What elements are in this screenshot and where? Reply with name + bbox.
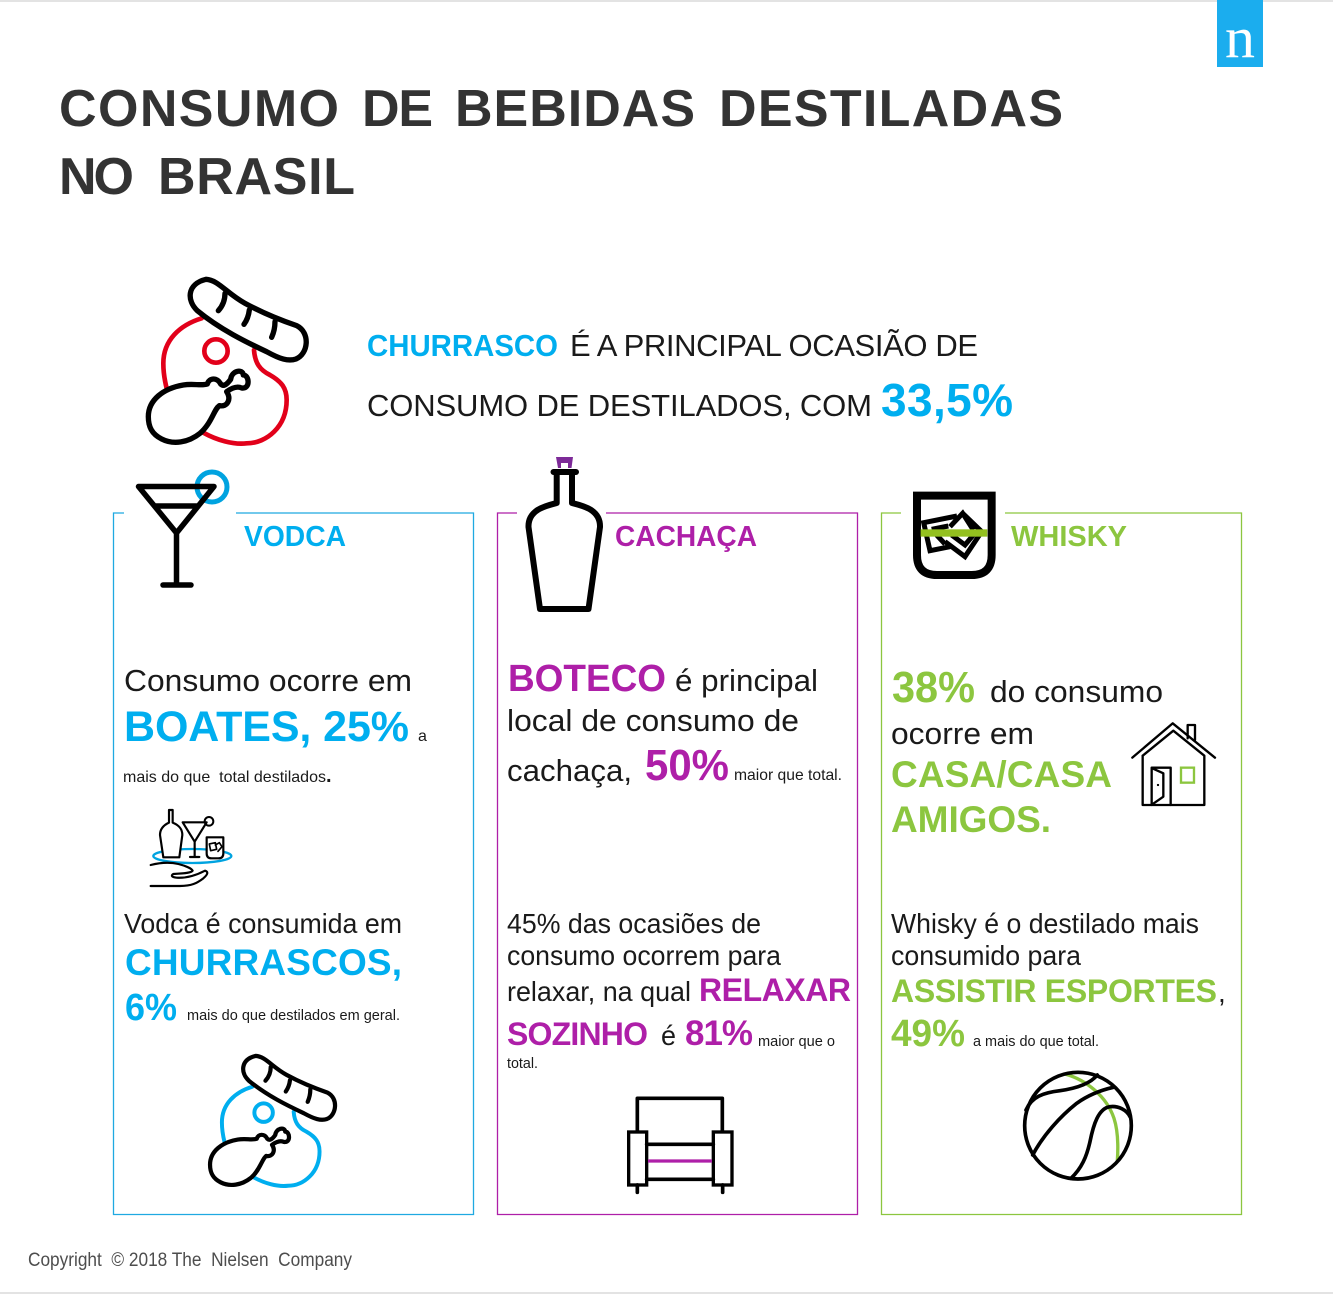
icon: bottle	[528, 457, 600, 609]
text: casa: CASA/CASA	[891, 754, 1112, 795]
text: boteco: BOTECO	[508, 658, 666, 700]
text: boates: BOATES, 25%	[124, 703, 409, 751]
text: boates: Consumo ocorre em	[124, 663, 412, 698]
logo: Nielsen	[1217, 0, 1263, 70]
text: relaxar sozinho: maior que o	[758, 1033, 835, 1050]
text: esportes: 49%	[891, 1013, 965, 1055]
text: boates	[123, 663, 427, 787]
text: esportes: ASSISTIR ESPORTES	[891, 973, 1217, 1009]
text: churrascos: CHURRASCOS,	[125, 942, 402, 983]
text: boteco: 50%	[645, 741, 729, 790]
text: boteco	[507, 658, 842, 790]
headline: churrasco: CHURRASCO	[367, 328, 558, 363]
icon: tray with drinks	[151, 810, 231, 886]
text: churrascos	[124, 908, 402, 1029]
text: relaxar sozinho: relaxar, na qual	[507, 976, 691, 1007]
title: CONSUMO	[59, 80, 339, 138]
icon: whisky glass	[917, 496, 992, 575]
icon: basketball	[1025, 1072, 1131, 1179]
text: boteco: cachaça,	[507, 753, 632, 788]
logo: Nielsen: n	[1225, 5, 1255, 70]
text: casa: ocorre em	[891, 716, 1034, 751]
text: boteco: é principal	[675, 663, 818, 698]
title	[59, 80, 1063, 206]
text: esportes: consumido para	[891, 940, 1081, 971]
headline: churrasco: 33,5%	[881, 374, 1013, 426]
heading: vodca: VODCA	[244, 521, 346, 553]
heading: whisky: WHISKY	[1011, 521, 1127, 553]
text: churrascos: 6%	[125, 987, 177, 1029]
heading: cachaça: CACHAÇA	[615, 521, 757, 553]
text: churrascos: mais do que destilados em geral.	[187, 1007, 400, 1024]
text: esportes	[891, 908, 1226, 1055]
text: casa: do consumo	[990, 674, 1163, 709]
text: boates: a	[418, 728, 427, 745]
title: BRASIL	[158, 148, 355, 206]
text: relaxar sozinho: 81%	[685, 1014, 753, 1053]
icon: house	[1132, 723, 1215, 805]
text: casa: AMIGOS.	[891, 799, 1051, 840]
text: esportes: a mais do que total.	[973, 1033, 1099, 1050]
text: relaxar sozinho: SOZINHO	[507, 1016, 648, 1052]
panel: whisky	[882, 496, 1242, 1214]
headline: churrasco: É A PRINCIPAL OCASIÃO DE	[570, 328, 978, 363]
headline: churrasco: CONSUMO DE DESTILADOS, COM	[367, 388, 872, 423]
text: casa	[891, 663, 1163, 840]
title: DESTILADAS	[719, 80, 1063, 138]
icon: armchair	[629, 1098, 732, 1192]
text: relaxar sozinho: 45% das ocasiões de	[507, 908, 761, 939]
text: relaxar sozinho: é	[661, 1020, 676, 1051]
text: relaxar sozinho: RELAXAR	[699, 972, 851, 1008]
text: relaxar sozinho: total.	[507, 1055, 538, 1072]
title: BEBIDAS	[455, 80, 695, 138]
text: boteco: maior que total.	[734, 767, 842, 784]
text: relaxar sozinho	[507, 908, 851, 1072]
panel: cachaça	[498, 457, 858, 1214]
copyright: Copyright © 2018 The Nielsen Company	[28, 1250, 352, 1271]
panel: vodca	[114, 472, 474, 1214]
headline: churrasco	[367, 328, 1013, 426]
text: casa: 38%	[892, 663, 975, 712]
icon: barbecue blue	[210, 1056, 335, 1186]
title: DE	[362, 80, 433, 138]
text: esportes: Whisky é o destilado mais	[891, 908, 1199, 939]
text: boates: mais do que total destilados	[123, 769, 326, 786]
text: boteco: local de consumo de	[507, 703, 799, 738]
icon: barbecue meat with sausage and chicken	[148, 279, 306, 444]
title: NO	[59, 148, 134, 206]
text: boates: .	[326, 765, 332, 787]
icon: cocktail glass	[138, 472, 227, 585]
text: esportes: ,	[1218, 977, 1226, 1008]
text: relaxar sozinho: consumo ocorrem para	[507, 940, 781, 971]
text: churrascos: Vodca é consumida em	[124, 908, 402, 939]
